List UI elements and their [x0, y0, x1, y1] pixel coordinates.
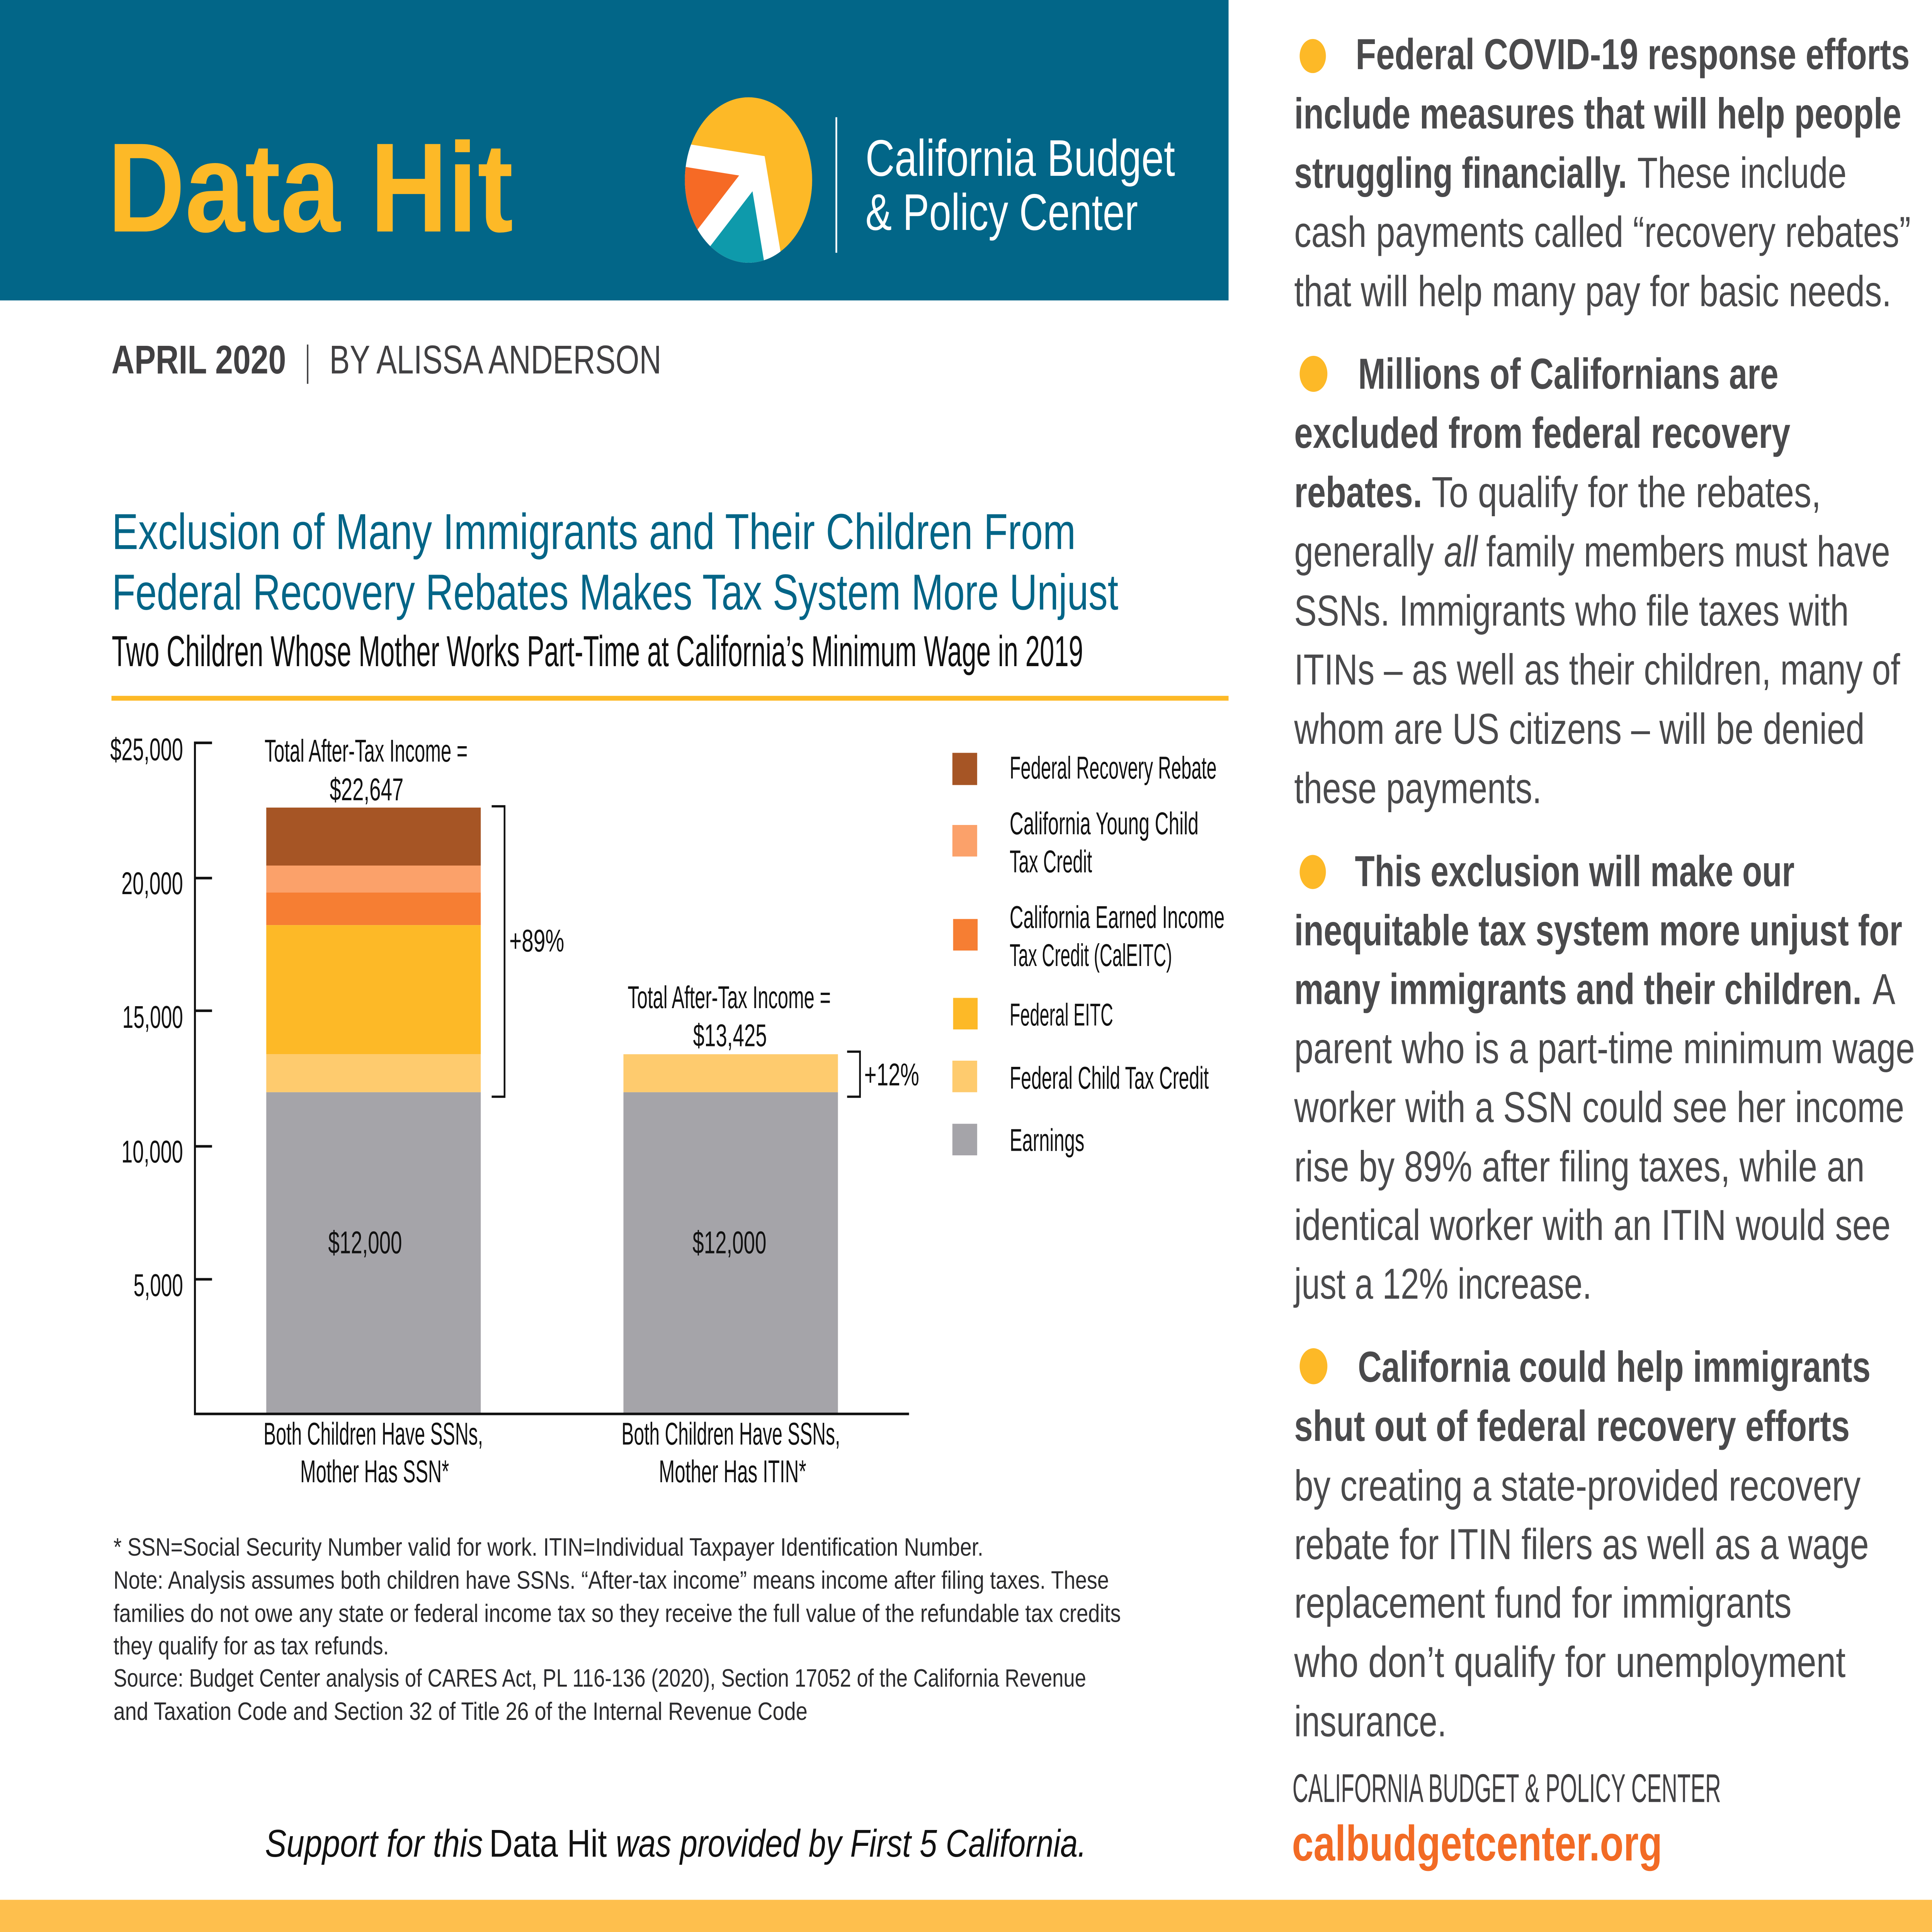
support credit	[265, 1821, 1087, 1865]
text block: federal response: cash payments called “recovery rebates”	[1294, 208, 1911, 257]
x axis labels: Mother Has ITIN*	[659, 1454, 806, 1489]
total label: second bar: $13,425	[693, 1018, 767, 1053]
text block: inequitable tax system	[1293, 847, 1915, 1308]
bracket: +89%	[492, 806, 564, 1097]
y axis labels: 5,000	[134, 1268, 183, 1303]
icon: California Budget & Policy Center logo mark	[685, 97, 812, 263]
text block: federal response: Federal COVID-19 response efforts	[1355, 30, 1910, 79]
chart legend	[952, 750, 1225, 1158]
text block: inequitable tax system: just a 12% increase.	[1293, 1260, 1592, 1308]
text block: California could help: replacement fund for immigrants	[1294, 1579, 1792, 1627]
title: Data Hit: Data Hit	[107, 117, 513, 259]
text block: California could help	[1294, 1343, 1871, 1746]
x axis labels	[264, 1416, 840, 1489]
icon: bullet 1	[1299, 39, 1326, 73]
logo wordmark	[866, 129, 1175, 241]
chart heading	[112, 503, 1118, 676]
footnotes and source: families do not owe any state or federal income tax so they receive the full value of the refundable tax credits	[114, 1600, 1121, 1628]
chart legend: Earnings	[1010, 1122, 1084, 1158]
chart legend: Tax Credit (CalEITC)	[1010, 938, 1172, 973]
text block: exclusion from rebates: excluded from federal recovery	[1294, 409, 1790, 457]
x axis labels: Mother Has SSN*	[300, 1454, 449, 1489]
text block: inequitable tax system: A	[1872, 965, 1895, 1014]
chart legend: Federal EITC	[1010, 997, 1113, 1032]
text block: inequitable tax system: worker with a SSN could see her income	[1294, 1083, 1904, 1132]
bar: Mother has SSN	[266, 808, 481, 1413]
text block: exclusion from rebates: family members must have	[1486, 527, 1890, 576]
chart legend: Federal Recovery Rebate	[1010, 750, 1217, 786]
text block: California could help: shut out of federal recovery efforts	[1294, 1402, 1850, 1451]
text block: exclusion from rebates	[1294, 350, 1900, 813]
text block: federal response	[1294, 30, 1911, 316]
date and byline: APRIL 2020	[111, 337, 286, 382]
header banner	[0, 0, 1228, 301]
text block: California could help: insurance.	[1294, 1697, 1447, 1746]
text block: exclusion from rebates: all	[1444, 527, 1478, 576]
bar: Mother has ITIN: $12,000	[692, 1225, 766, 1260]
footnotes and source	[114, 1534, 1121, 1725]
chart legend: California Earned Income	[1010, 900, 1225, 935]
total label: first bar: $22,647	[330, 772, 403, 807]
text block: federal response: struggling financially.	[1294, 149, 1627, 197]
chart legend: Tax Credit	[1010, 844, 1092, 879]
bracket: +12%	[847, 1052, 919, 1097]
icon: bullet 2	[1299, 356, 1327, 392]
text block: inequitable tax system: identical worker with an ITIN would see	[1294, 1201, 1891, 1250]
logo wordmark: & Policy Center	[866, 184, 1138, 241]
total label: first bar: Total After-Tax Income =	[265, 733, 468, 769]
logo wordmark: California Budget	[866, 129, 1175, 187]
bar: Mother has SSN: $12,000	[328, 1225, 402, 1260]
chart axes	[195, 743, 909, 1414]
text block: inequitable tax system: parent who is a part-time minimum wage	[1294, 1024, 1915, 1073]
organization footer: CALIFORNIA BUDGET & POLICY CENTER	[1293, 1765, 1721, 1811]
text block: inequitable tax system: inequitable tax system more unjust for	[1294, 906, 1902, 955]
text block: exclusion from rebates: Millions of Californians are	[1358, 350, 1779, 398]
text block: inequitable tax system: This exclusion will make our	[1355, 847, 1794, 896]
text block: California could help: by creating a state-provided recovery	[1294, 1461, 1861, 1510]
text block: exclusion from rebates: ITINs – as well as their children, many of	[1294, 646, 1900, 694]
text block: inequitable tax system: rise by 89% after filing taxes, while an	[1294, 1143, 1865, 1191]
y axis labels: 20,000	[121, 866, 183, 901]
footnotes and source: Note: Analysis assumes both children have SSNs. “After-tax income” means income after filing taxes. These	[114, 1566, 1109, 1594]
total label: second bar: Total After-Tax Income =	[628, 980, 831, 1015]
bracket: +12%: +12%	[864, 1057, 919, 1092]
date and byline: BY ALISSA ANDERSON	[330, 337, 662, 382]
logo divider	[835, 117, 837, 253]
website link: calbudgetcenter.org	[1292, 1816, 1662, 1871]
text block: California could help: who don’t qualify for unemployment	[1294, 1638, 1845, 1687]
footnotes and source: * SSN=Social Security Number valid for work. ITIN=Individual Taxpayer Identification Number.	[114, 1534, 983, 1561]
text block: exclusion from rebates: these payments.	[1294, 764, 1542, 813]
support credit: was provided by First 5 California.	[616, 1821, 1087, 1865]
total label: second bar	[628, 980, 831, 1053]
stacked bar chart	[110, 732, 919, 1489]
text block: exclusion from rebates: To qualify for the rebates,	[1432, 468, 1821, 517]
chart legend: Federal Child Tax Credit	[1010, 1061, 1209, 1095]
support credit: Data Hit	[489, 1821, 607, 1865]
text block: exclusion from rebates: rebates.	[1294, 468, 1422, 517]
y axis labels: 10,000	[121, 1134, 183, 1169]
chart heading: Exclusion of Many Immigrants and Their Children From	[112, 503, 1076, 560]
footnotes and source: Source: Budget Center analysis of CARES Act, PL 116-136 (2020), Section 17052 of the California Revenue	[114, 1665, 1086, 1692]
bar: Mother has ITIN	[623, 1054, 838, 1413]
chart legend: California Young Child	[1010, 806, 1199, 841]
footnotes and source: they qualify for as tax refunds.	[114, 1632, 389, 1660]
icon: bullet 3	[1299, 855, 1326, 889]
text block: exclusion from rebates: generally	[1294, 527, 1434, 576]
total label: first bar	[265, 733, 468, 807]
chart subtitle: Two Children Whose Mother Works Part-Time at California’s Minimum Wage in 2019	[112, 627, 1083, 676]
y axis labels	[110, 732, 183, 1303]
x axis labels: Both Children Have SSNs,	[264, 1416, 483, 1451]
icon: bullet 4	[1299, 1348, 1327, 1384]
text block: federal response: include measures that will help people	[1294, 90, 1901, 138]
text block: federal response: These include	[1637, 149, 1847, 197]
x axis labels: Both Children Have SSNs,	[621, 1416, 840, 1451]
date and byline	[111, 337, 662, 384]
text block: exclusion from rebates: whom are US citizens – will be denied	[1294, 705, 1865, 753]
chart heading: Federal Recovery Rebates Makes Tax System More Unjust	[112, 564, 1118, 621]
text block: California could help: California could help immigrants	[1358, 1343, 1871, 1391]
text block: California could help: rebate for ITIN filers as well as a wage	[1294, 1520, 1869, 1569]
text block: exclusion from rebates: SSNs. Immigrants who file taxes with	[1294, 587, 1849, 635]
bracket: +89%: +89%	[509, 923, 564, 958]
y axis labels: $25,000	[110, 732, 183, 767]
organization footer	[1292, 1765, 1721, 1871]
support credit: Support for this	[265, 1821, 483, 1865]
text block: inequitable tax system: many immigrants and their children.	[1294, 965, 1862, 1014]
footnotes and source: and Taxation Code and Section 32 of Title 26 of the Internal Revenue Code	[114, 1698, 808, 1725]
y axis labels: 15,000	[122, 1000, 183, 1035]
text block: federal response: that will help many pay for basic needs.	[1294, 267, 1891, 316]
